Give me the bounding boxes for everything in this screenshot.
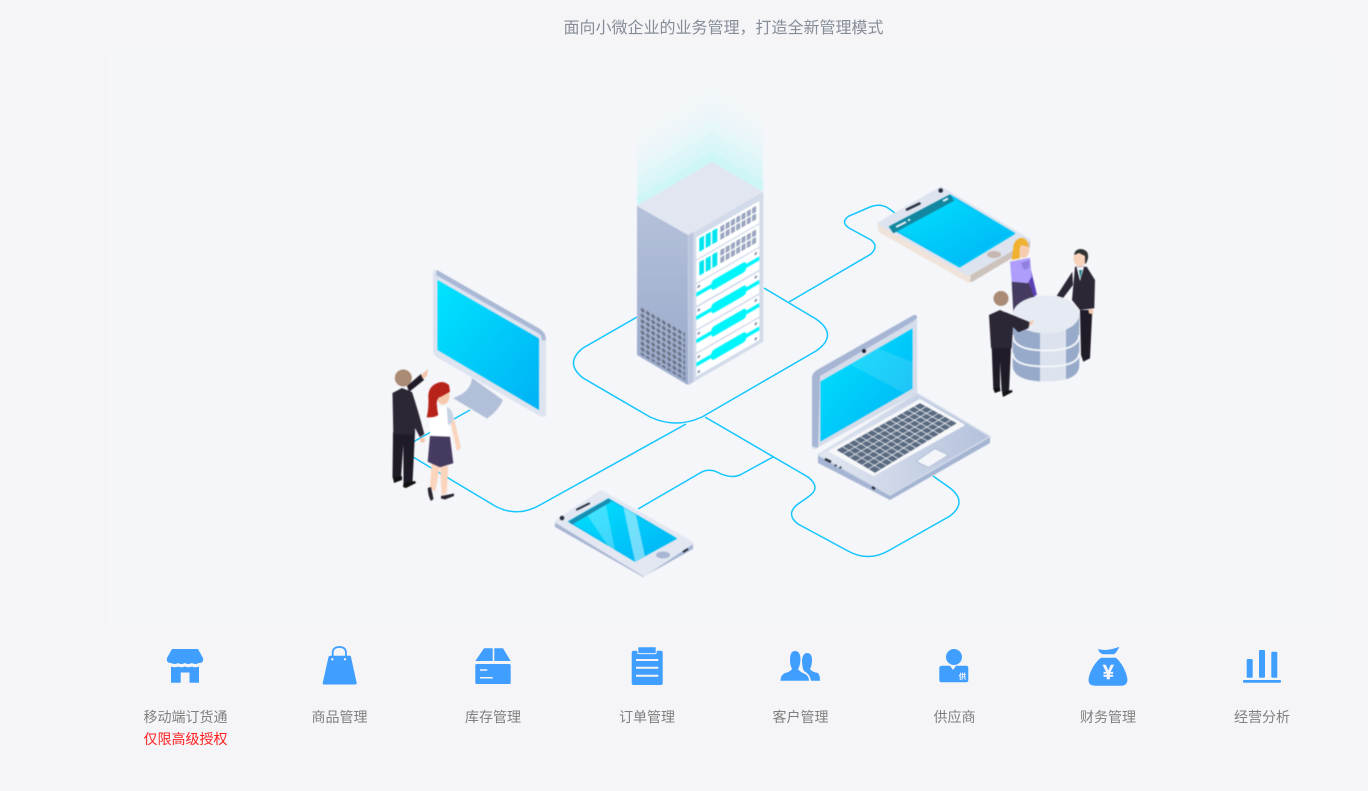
- network connection lines: [413, 205, 959, 556]
- label: 财务管理: [1080, 709, 1136, 725]
- monitor stand: [453, 378, 503, 418]
- illustration background panel: [108, 50, 1335, 625]
- laptop ports: [825, 459, 875, 489]
- drive row 6: [696, 318, 759, 376]
- label: 商品管理: [312, 709, 368, 725]
- monitor screen: [438, 280, 539, 410]
- laptop lid: [812, 315, 917, 449]
- switch row 2: [696, 225, 759, 283]
- item: 客户管理: [772, 651, 828, 725]
- server left face: [637, 206, 688, 385]
- drive row 4: [696, 272, 759, 329]
- tablet speaker, camera and button: [907, 204, 920, 210]
- database with people: [989, 238, 1095, 397]
- label: 订单管理: [619, 709, 675, 725]
- man at right: [1057, 249, 1095, 362]
- phone screen: [569, 499, 676, 561]
- icon: shopping bag: [323, 647, 357, 684]
- tablet body: [879, 188, 1029, 274]
- item: 经营分析: [1234, 650, 1290, 725]
- woman in purple: [1010, 238, 1037, 312]
- webcam: [862, 349, 866, 353]
- laptop: [812, 315, 990, 500]
- laptop base: [818, 436, 990, 500]
- item: 商品管理: [312, 647, 368, 725]
- icon: clipboard: [632, 647, 663, 685]
- glow above server: [639, 84, 761, 204]
- server top face: [637, 162, 764, 235]
- tablet side: [878, 223, 1030, 282]
- drive row 3: [696, 248, 759, 306]
- icon: store: [167, 649, 203, 683]
- icon: supplier: 供: [959, 671, 967, 681]
- item: 财务管理: [1080, 647, 1136, 725]
- icon: customers: [780, 651, 820, 681]
- smartphone: [555, 492, 693, 577]
- server rack with glow: [637, 84, 764, 385]
- phone body: [555, 522, 693, 577]
- phone speaker, camera and button: [577, 504, 589, 510]
- man at left: [989, 291, 1034, 397]
- feature bar: [144, 647, 1290, 747]
- desktop monitor: [433, 270, 546, 418]
- server front face: [688, 192, 763, 385]
- monitor frame: [433, 270, 546, 417]
- keyboard: [830, 400, 964, 475]
- icon: box: [475, 648, 511, 684]
- title: 面向小微企业的业务管理，打造全新管理模式: [563, 19, 884, 37]
- people at monitor: [392, 369, 461, 501]
- label: 客户管理: [772, 709, 828, 725]
- item: 订单管理: [619, 647, 675, 725]
- label: 库存管理: [465, 709, 521, 725]
- database cylinder: [1013, 296, 1079, 382]
- touchpad: [916, 448, 948, 468]
- tablet screen: [890, 196, 1014, 266]
- icon: bar chart: [1243, 650, 1281, 683]
- woman in white blouse: [427, 382, 461, 501]
- item: 供应商: [934, 649, 976, 725]
- item: 库存管理: [465, 648, 521, 725]
- drive row 5: [696, 295, 759, 353]
- man pointing: [392, 369, 428, 488]
- icon: money bag: ¥: [1103, 662, 1115, 684]
- switch row 1: [696, 201, 759, 259]
- vent grille: [640, 306, 685, 380]
- red note: 仅限高级授权: [144, 731, 228, 747]
- label: 供应商: [934, 709, 976, 725]
- label: 经营分析: [1234, 709, 1290, 725]
- label: 移动端订货通: [144, 709, 228, 725]
- laptop screen: [820, 328, 912, 442]
- item: 移动端订货通: [144, 649, 228, 747]
- tablet: [878, 188, 1030, 282]
